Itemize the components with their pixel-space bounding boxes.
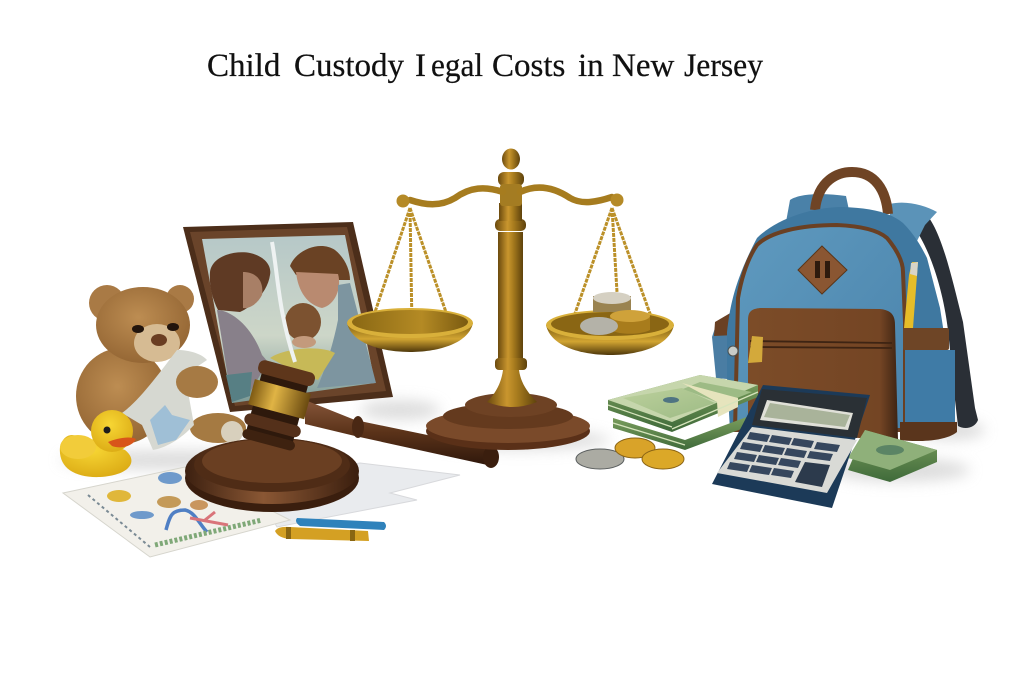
- right chains: [572, 208, 653, 322]
- gavel head: [239, 359, 316, 452]
- diamond patch: [798, 246, 847, 294]
- brown front pocket: [748, 308, 898, 440]
- title: egal: [431, 48, 483, 84]
- backpack shoulder pads: [786, 194, 850, 222]
- icon: backpack: [712, 172, 978, 441]
- title: Jersey: [684, 48, 763, 84]
- title: New: [612, 48, 674, 84]
- drawing paper: [63, 463, 460, 557]
- icon: cash stack right: [848, 430, 937, 482]
- scale column: [487, 172, 537, 407]
- title: I: [415, 48, 426, 84]
- photo tear: [272, 242, 295, 362]
- scale finial: [502, 148, 520, 170]
- title: Child: [207, 48, 281, 84]
- title: in: [578, 48, 604, 84]
- sound block: [185, 438, 359, 512]
- icon: cash stacks: [608, 375, 758, 450]
- photo: child: [270, 303, 335, 380]
- ground shadows: [60, 400, 985, 482]
- photo: man: [290, 246, 376, 388]
- pencil: [904, 262, 918, 328]
- scale beam: [410, 188, 612, 204]
- photo: woman: [210, 252, 270, 402]
- icon: teddy bear: [76, 285, 246, 450]
- title: Costs: [492, 48, 565, 84]
- metal buckle: [728, 346, 738, 356]
- icon: gavel: [185, 359, 499, 512]
- icon: picture frame: [183, 222, 393, 412]
- icon: rubber duck: [60, 410, 136, 477]
- blanket: [122, 350, 207, 450]
- backpack handle: [815, 172, 888, 214]
- side pockets: [712, 318, 738, 380]
- left pan: [347, 308, 473, 352]
- icon: crayons: [275, 518, 386, 541]
- icon: calculator: [712, 385, 870, 508]
- gavel handle: [305, 400, 499, 468]
- backpack strap: [912, 210, 978, 428]
- scale base: [426, 393, 590, 450]
- title: Custody: [294, 48, 405, 84]
- calculator keys: [727, 432, 840, 487]
- right side pocket: [900, 328, 957, 441]
- right pan: [546, 292, 674, 355]
- icon: balance scale: [347, 148, 674, 450]
- left chains: [373, 208, 448, 327]
- backpack body: [727, 207, 950, 430]
- icon: coins: [576, 438, 684, 469]
